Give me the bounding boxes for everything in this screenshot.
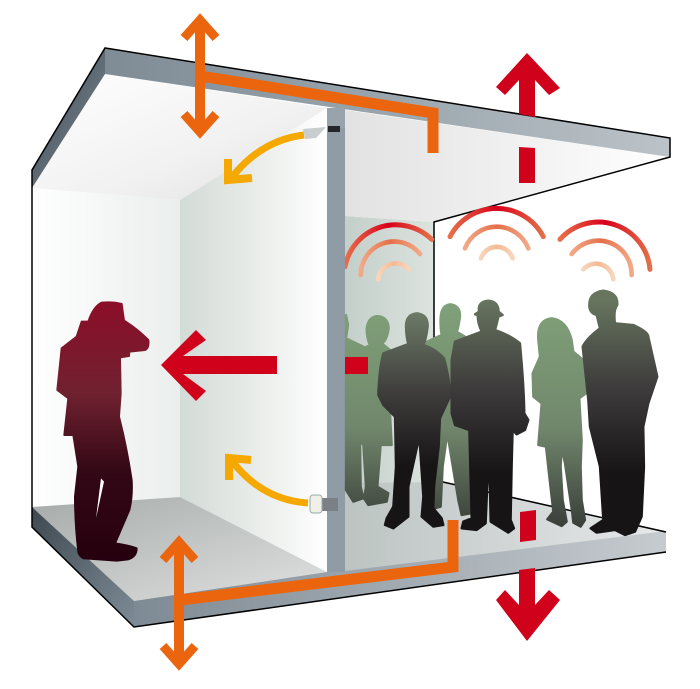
sound waves [345,208,650,279]
woman [533,318,586,527]
man behind [423,304,471,515]
partition wall [327,108,345,572]
woman in dress [358,316,392,505]
ceiling slab [32,48,670,340]
person far left [346,315,363,502]
yellow flanking arrow: bottom [229,458,338,513]
listener silhouette [57,302,149,561]
red arrow up through ceiling [496,53,560,183]
orange flanking path: floor [163,520,453,664]
left room side wall [180,108,327,572]
floor slab [32,188,666,627]
orange flanking path: ceiling [184,20,433,153]
red arrow through wall [161,330,368,401]
man in jumper [378,313,450,528]
crowd silhouettes [346,291,657,535]
left room back wall [32,188,180,507]
tall man [583,291,657,535]
right room back wall [345,216,434,490]
red arrow down through floor [496,510,560,641]
yellow flanking arrow: top [228,126,340,180]
man in suit [452,301,528,533]
